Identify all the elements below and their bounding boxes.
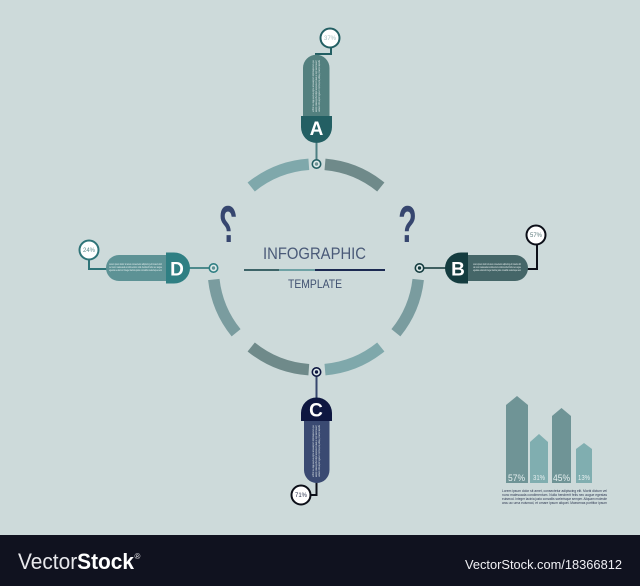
subtitle: TEMPLATE (288, 277, 342, 291)
letter C: C (309, 400, 323, 422)
capsule B text: egestas euismod integer lacinia justo convallis scelerisque sem (473, 269, 521, 272)
footer registered mark: ® (134, 552, 140, 561)
footer logo: VectorStock (18, 549, 135, 574)
capsule A (303, 55, 330, 116)
capsule C text: vel nunc malesuada condimentum nulla hendrerit felis nec augue (312, 425, 314, 478)
head A (301, 116, 332, 143)
badge C: 71% (295, 493, 308, 499)
badge B: 57% (530, 233, 543, 239)
letter A: A (310, 119, 324, 140)
capsule D (106, 255, 167, 281)
capsule D text: Lorem ipsum dolor sit amet consectetur adipiscing elit mauris dict (109, 263, 162, 266)
node A (312, 160, 321, 168)
element A (301, 28, 340, 168)
footer url: VectorStock.com/18366812 (465, 557, 622, 572)
capsule D text: egestas euismod integer lacinia justo convallis scelerisque sem (109, 269, 162, 272)
chart caption: arcu ac urna euismod, et ornare ipsum aliquet. Maecenas porttitor ipsum (502, 501, 607, 505)
capsule A text: egestas euismod integer lacinia justo convallis scelerisque semper (318, 60, 320, 112)
node B (415, 264, 424, 272)
letter D: D (170, 260, 184, 280)
capsule B (467, 255, 528, 281)
badge A: 37% (324, 36, 337, 42)
title divider (244, 269, 385, 271)
capsule C (304, 420, 330, 483)
ring: segmented circle (214, 164, 418, 370)
bar 45%: 45% (553, 473, 570, 484)
chart caption: nunc malesuada condimentum. Nulla hendrerit felis nec augue egestas (502, 493, 607, 497)
element D (80, 240, 218, 284)
badge D: 24% (83, 248, 96, 254)
capsule B text: Lorem ipsum dolor sit amet consectetur adipiscing elit mauris dict (473, 263, 521, 266)
capsule C text: egestas euismod integer lacinia justo convallis scelerisque semper (318, 425, 320, 477)
bar chart (506, 396, 592, 484)
capsule D text: vel nunc malesuada condimentum nulla hendrerit felis nec augue (109, 266, 163, 269)
title: INFOGRAPHIC (263, 244, 366, 263)
element B (415, 226, 546, 284)
icon: question mark right: ? (398, 197, 417, 254)
capsule A text: vel nunc malesuada condimentum nulla hendrerit felis nec augue (312, 60, 314, 113)
bar 57%: 57% (508, 473, 525, 484)
letter B: B (451, 260, 465, 280)
head B (445, 252, 468, 284)
footer bar (0, 535, 640, 586)
chart caption: Lorem ipsum dolor sit amet, consectetur adipiscing elit. Morbi dictum vel (502, 489, 607, 493)
head D (166, 252, 190, 284)
bar 13%: 13% (578, 473, 590, 482)
capsule A text: Lorem ipsum dolor sit amet consectetur adipiscing elit mauris dictum (314, 60, 318, 112)
bar 31%: 31% (533, 473, 545, 482)
capsule C text: Lorem ipsum dolor sit amet consectetur adipiscing elit mauris dictum (314, 425, 318, 477)
chart caption: euismod. Integer lacinia justo convallis scelerisque semper. Aliquam molestie (502, 497, 607, 501)
capsule B text: vel nunc malesuada condimentum nulla hendrerit felis nec augue (473, 266, 521, 269)
node C (312, 368, 321, 376)
head C (301, 398, 332, 421)
element C (292, 368, 332, 504)
node D (209, 264, 218, 272)
icon: question mark left: ? (219, 197, 237, 254)
